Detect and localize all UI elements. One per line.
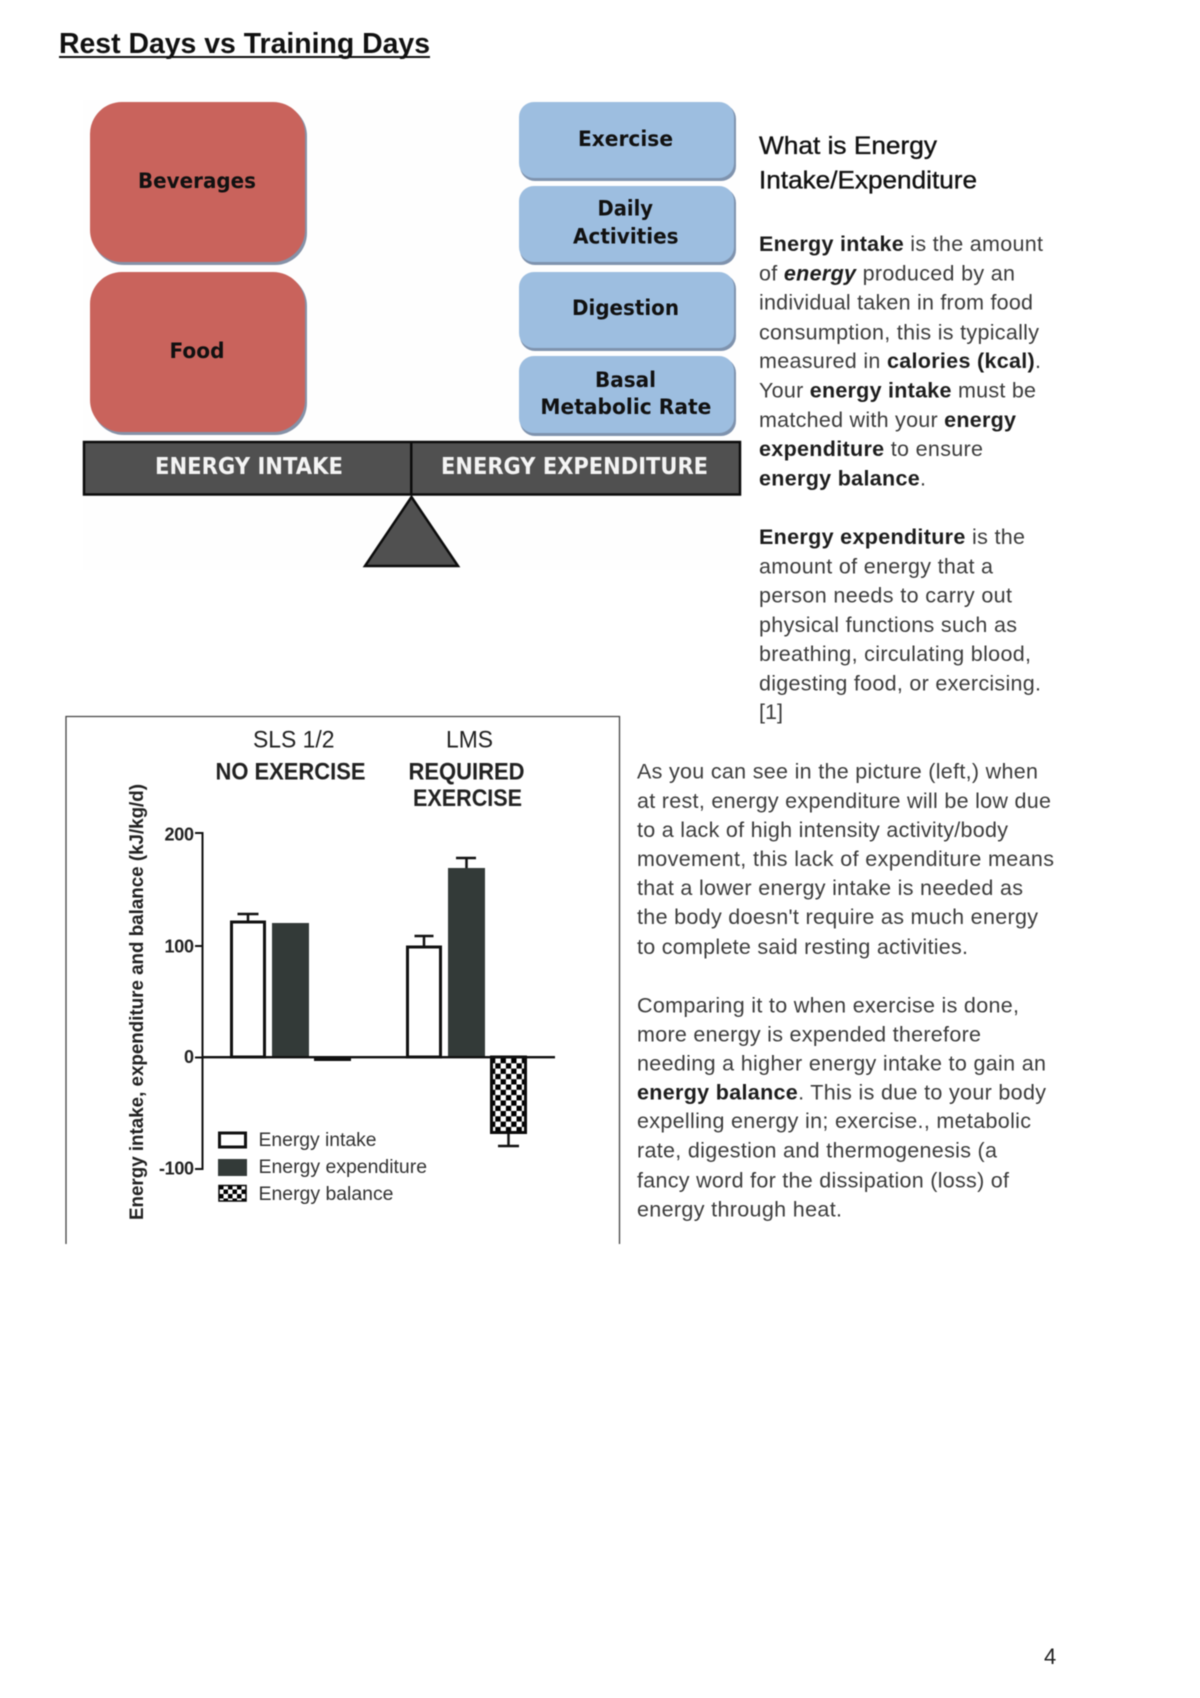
bars: no exercise group — [232, 914, 351, 1061]
text block: energy expenditure definition: person needs to carry out — [759, 584, 1012, 608]
scale beam — [84, 442, 740, 494]
text block: energy intake definition: Energy intake is the amount — [759, 232, 1043, 256]
energy intake box: food — [90, 272, 307, 435]
heading: what is energy intake/expenditure — [759, 132, 977, 194]
energy intake box: food: Food — [170, 339, 224, 364]
text block: energy expenditure definition: Energy expenditure is the — [759, 525, 1025, 549]
text block: energy intake definition: energy balance. — [759, 466, 926, 490]
expenditure box: exercise — [519, 102, 736, 181]
expenditure box: basal metabolic rate: Metabolic Rate — [540, 395, 711, 420]
text block: energy intake definition: Your energy intake must be — [759, 378, 1036, 402]
column heading: SLS 1/2 no exercise: NO EXERCISE — [216, 758, 366, 786]
scale fulcrum — [365, 497, 458, 566]
text block: energy intake definition — [759, 232, 1043, 490]
bar chart panel — [66, 716, 620, 1244]
legend: Energy expenditure — [258, 1157, 427, 1178]
column heading: LMS required exercise: REQUIRED — [408, 758, 524, 786]
text block: at rest explanation — [637, 760, 1054, 959]
text block: at rest explanation: movement, this lack of expenditure means — [637, 847, 1054, 871]
text block: at rest explanation: at rest, energy expenditure will be low due — [637, 789, 1051, 813]
y axis with ticks: 100 — [164, 936, 194, 956]
scale beam: ENERGY EXPENDITURE — [441, 454, 708, 480]
energy balance scale diagram — [83, 100, 740, 570]
y axis with ticks: 0 — [184, 1047, 194, 1067]
text block: exercise explanation: Comparing it to when exercise is done, — [637, 993, 1019, 1017]
column heading: SLS 1/2 no exercise — [216, 726, 366, 786]
expenditure box: daily activities: Daily — [598, 196, 653, 222]
expenditure box: exercise: Exercise — [578, 127, 673, 152]
text block: energy expenditure definition: physical functions such as — [759, 613, 1017, 637]
text block: at rest explanation: to complete said resting activities. — [637, 935, 968, 959]
text block: exercise explanation: expelling energy in; exercise., metabolic — [637, 1109, 1031, 1133]
text block: exercise explanation: energy balance. This is due to your body — [637, 1080, 1046, 1104]
text block: exercise explanation — [637, 993, 1046, 1222]
legend: Energy intake — [258, 1130, 376, 1151]
text block: energy intake definition: individual taken in from food — [759, 291, 1033, 315]
scale beam: ENERGY INTAKE — [155, 454, 343, 480]
text block: at rest explanation: to a lack of high intensity activity/body — [637, 818, 1008, 842]
text block: energy intake definition: expenditure to ensure — [759, 437, 983, 461]
y axis with ticks: 200 — [164, 824, 194, 844]
y axis with ticks — [159, 824, 202, 1178]
text block: energy expenditure definition: [1] — [759, 700, 783, 724]
text block: energy expenditure definition: amount of energy that a — [759, 554, 993, 578]
text block: exercise explanation: more energy is expended therefore — [637, 1022, 981, 1046]
text block: at rest explanation: As you can see in the picture (left,) when — [637, 760, 1038, 784]
text block: energy intake definition: consumption, this is typically — [759, 321, 1039, 345]
energy intake box: beverages: Beverages — [138, 169, 256, 194]
legend: Energy balance — [258, 1184, 394, 1205]
column heading: SLS 1/2 no exercise: SLS 1/2 — [253, 726, 334, 754]
text block: exercise explanation: needing a higher energy intake to gain an — [637, 1052, 1046, 1076]
y axis title: Energy intake, expenditure and balance (kJ/kg/d) — [127, 784, 148, 1220]
text block: exercise explanation: rate, digestion and thermogenesis (a — [637, 1138, 997, 1162]
expenditure box: digestion: Digestion — [572, 296, 679, 321]
energy intake box: beverages — [90, 102, 307, 265]
page number: 4 — [1044, 1644, 1056, 1669]
text block: at rest explanation: the body doesn't require as much energy — [637, 905, 1038, 929]
y axis with ticks: -100 — [159, 1158, 194, 1178]
text block: energy intake definition: matched with your energy — [759, 408, 1016, 432]
column heading: LMS required exercise: LMS — [446, 726, 493, 754]
expenditure box: basal metabolic rate — [519, 356, 736, 436]
expenditure box: digestion — [519, 272, 736, 351]
bars: required exercise group — [408, 858, 526, 1146]
heading: what is energy intake/expenditure: What is Energy — [759, 132, 938, 160]
text block: at rest explanation: that a lower energy intake is needed as — [637, 876, 1023, 900]
column heading: LMS required exercise: EXERCISE — [413, 785, 522, 812]
x axis baseline — [202, 1056, 555, 1058]
text block: exercise explanation: energy through heat. — [637, 1198, 842, 1222]
text block: energy expenditure definition: digesting food, or exercising. — [759, 672, 1041, 696]
title: Rest Days vs Training Days — [59, 28, 430, 60]
expenditure box: basal metabolic rate: Basal — [595, 368, 656, 393]
expenditure box: daily activities — [519, 186, 736, 265]
text block: energy expenditure definition — [759, 525, 1041, 724]
column heading: LMS required exercise — [408, 726, 524, 812]
heading: what is energy intake/expenditure: Intake/Expenditure — [759, 166, 977, 194]
legend — [218, 1130, 427, 1205]
text block: energy intake definition: measured in calories (kcal). — [759, 349, 1041, 373]
text block: energy expenditure definition: breathing, circulating blood, — [759, 642, 1031, 666]
text block: energy intake definition: of energy produced by an — [759, 261, 1015, 285]
text block: exercise explanation: fancy word for the dissipation (loss) of — [637, 1168, 1009, 1192]
expenditure box: daily activities: Activities — [573, 225, 679, 250]
